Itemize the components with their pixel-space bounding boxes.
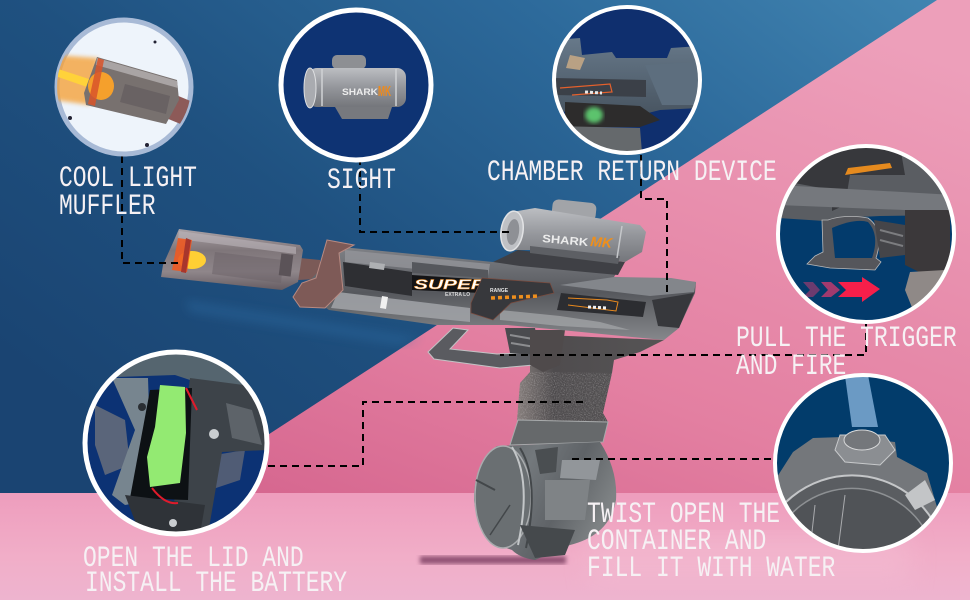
connector: sight xyxy=(360,158,509,232)
label: twist open the container xyxy=(587,498,835,586)
label: chamber return device: CHAMBER RETURN DEVICE xyxy=(487,156,777,190)
rear slide top xyxy=(560,277,696,296)
label: pull the trigger and fire xyxy=(736,322,957,384)
label: twist open the container: TWIST OPEN THE xyxy=(587,498,780,532)
gun front cap xyxy=(293,240,354,308)
label: cool light muffler: MUFFLER xyxy=(59,190,156,224)
connector: trigger xyxy=(500,321,866,355)
label: sight: SIGHT xyxy=(327,164,396,198)
SUPER label panel xyxy=(412,275,489,298)
inset circle: sight xyxy=(281,10,431,160)
label: cool light muffler xyxy=(59,162,197,224)
RANGE panel xyxy=(471,278,554,320)
SUPER label panel: EXTRA LO xyxy=(445,292,470,298)
label: open the lid and install the battery: OPEN THE LID AND xyxy=(83,542,304,576)
label: open the lid and install the battery xyxy=(83,542,347,600)
rear side panel xyxy=(557,293,646,317)
inset circle: battery compartment xyxy=(85,352,267,534)
connector: battery xyxy=(268,402,583,466)
gun grip xyxy=(517,335,664,422)
gun muffler xyxy=(161,229,320,290)
SUPER label panel: SUPER xyxy=(414,276,487,292)
inset circle: sight: SHARK xyxy=(342,87,379,97)
label: twist open the container: FILL IT WITH WATER xyxy=(587,552,835,586)
trigger guard and trigger xyxy=(428,328,565,372)
inset circle: pull the trigger xyxy=(778,146,954,322)
RANGE panel: RANGE xyxy=(490,288,509,294)
inset circle: water container xyxy=(759,375,951,551)
connector: water container xyxy=(572,458,773,460)
connector: chamber return device xyxy=(641,155,667,295)
label: pull the trigger and fire: AND FIRE xyxy=(736,350,846,384)
scope on gun: SHARK xyxy=(542,233,589,249)
rear slide end xyxy=(652,293,694,328)
connector: muffler xyxy=(122,156,178,263)
inset circle: chamber return device xyxy=(554,7,700,153)
label: twist open the container: CONTAINER AND xyxy=(587,525,766,559)
inset circle: cool light muffler xyxy=(55,20,200,154)
gun collar xyxy=(510,420,608,445)
label: cool light muffler: COOL LIGHT xyxy=(59,162,197,196)
inset circle: sight: MK xyxy=(378,83,391,100)
scope on gun xyxy=(493,199,646,275)
gun body and slide xyxy=(300,246,696,340)
label: pull the trigger and fire: PULL THE TRIGGER xyxy=(736,322,957,356)
water drum xyxy=(474,442,616,560)
scope on gun: MK xyxy=(590,233,614,251)
water gun xyxy=(161,199,696,560)
